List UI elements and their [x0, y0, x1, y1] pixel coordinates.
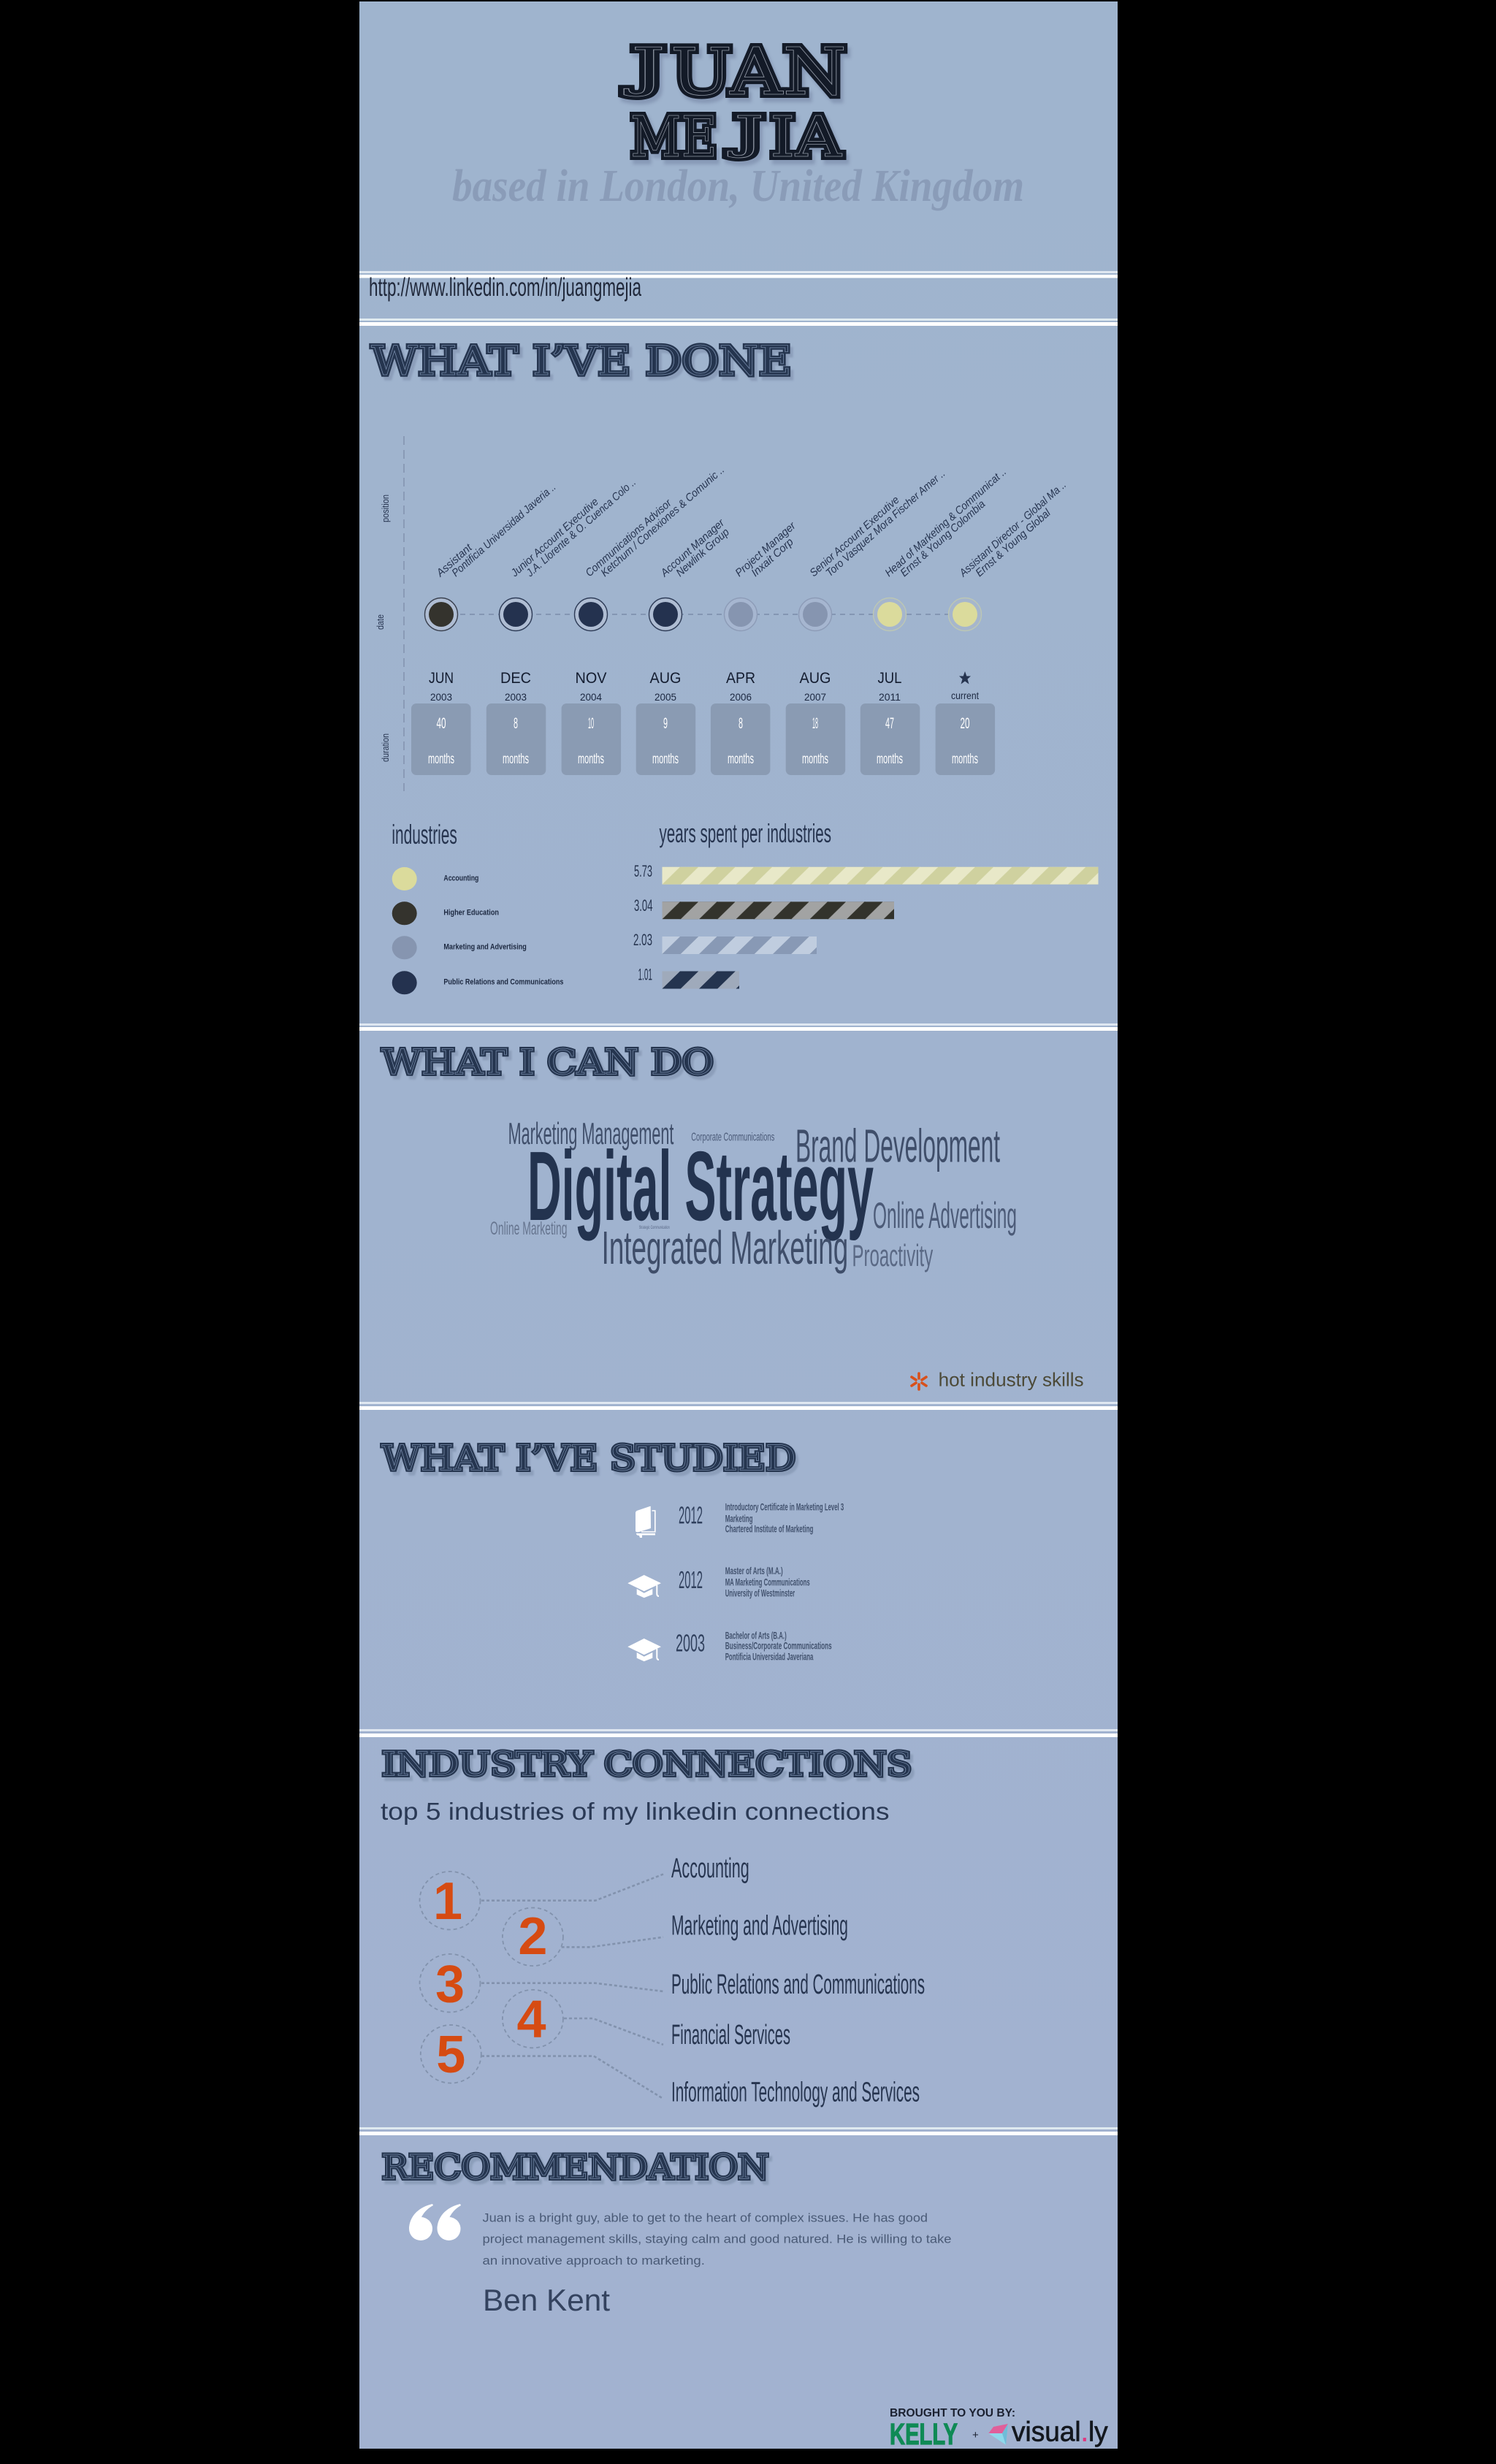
logo: visual.ly wordmark: visual.ly: [1012, 2417, 1108, 2448]
section: what I've done: [371, 337, 1099, 994]
title: Juan Mejia: ME: [630, 105, 717, 170]
title: Juan Mejia: J: [623, 37, 665, 98]
rank 4: financial services: 4: [516, 1991, 546, 2049]
course: certificate: [679, 1500, 844, 1535]
industries legend: Higher Education: [443, 909, 499, 918]
start dates: JUN: [429, 670, 454, 687]
job titles: Inxait Corp: [749, 535, 796, 579]
job titles: [434, 464, 1069, 580]
footer credits: BROUGHT TO YOU BY:: [890, 2407, 1015, 2419]
title: Juan Mejia: UAN: [671, 34, 847, 110]
duration boxes: months: [802, 752, 828, 767]
quote author: Ben Kent: [483, 2283, 610, 2317]
quote text: [482, 2211, 951, 2267]
rank 3: public relations: 3: [435, 1955, 465, 2013]
job titles: J.A. Llorente & O. Cuenca Colo ..: [524, 476, 638, 580]
start dates: [429, 670, 979, 703]
section: what I can do: [381, 1042, 1084, 1390]
title: Juan Mejia: IA: [770, 105, 843, 170]
icon: graduation cap: [627, 1639, 661, 1661]
bar chart: years per industry: 2.03: [633, 931, 652, 949]
start dates: 2006: [730, 691, 752, 703]
title: Juan Mejia: [623, 34, 847, 170]
subheading: top 5 industries of my linkedin connections: [381, 1798, 890, 1825]
duration boxes: months: [578, 752, 604, 767]
start dates: 2004: [580, 691, 602, 703]
rank 3: public relations: Public Relations and Communications: [671, 1969, 925, 2000]
course: masters: MA Marketing Communications: [725, 1576, 810, 1588]
start dates: 2003: [505, 691, 527, 703]
job titles: Assistant: [434, 541, 475, 580]
bar chart: years per industry: years spent per industries: [659, 818, 831, 848]
industries legend: Accounting: [443, 874, 478, 883]
heading: industry connections: INDUSTRY CONNECTIONS: [381, 1744, 912, 1784]
start dates: 2007: [804, 691, 826, 703]
rank 4: financial services: [503, 1990, 790, 2051]
course: masters: Master of Arts (M.A.): [725, 1565, 783, 1576]
start dates: AUG: [650, 670, 681, 687]
start dates: 2005: [654, 691, 676, 703]
start dates: AUG: [799, 670, 831, 687]
section: industry connections: [381, 1744, 925, 2108]
title: Juan Mejia: IA: [770, 105, 843, 170]
duration boxes: months: [952, 752, 978, 767]
rank 1: accounting: [419, 1853, 749, 1931]
bar chart: years per industry: 3.04: [634, 896, 653, 915]
course: certificate: Marketing: [725, 1512, 752, 1524]
course: bachelors: Business/Corporate Communications: [725, 1639, 832, 1651]
job titles: Project Manager: [733, 519, 798, 579]
job titles: Junior Account Executive: [508, 495, 601, 580]
heading: recommendation: RECOMMENDATION: [381, 2148, 768, 2187]
bar chart: years per industry: 1.01: [638, 966, 652, 984]
title: Juan Mejia: UAN: [671, 34, 847, 110]
section: recommendation: [381, 2148, 951, 2317]
course: masters: [679, 1565, 810, 1599]
quote text: Juan is a bright guy, able to get to the heart of complex issues. He has good: [482, 2211, 928, 2225]
duration boxes: 8: [514, 715, 518, 732]
job titles: Head of Marketing & Communicat ..: [882, 465, 1009, 579]
background panel: [359, 1, 1118, 2449]
icon: book: [636, 1506, 655, 1538]
duration boxes: months: [503, 752, 529, 767]
icon: graduation cap: [627, 1575, 661, 1598]
icon: quote mark: [409, 2204, 461, 2240]
start dates: JUL: [878, 670, 901, 687]
rank 5: information technology: Information Technology and Services: [671, 2078, 920, 2108]
duration boxes: 10: [588, 715, 594, 732]
rank 5: information technology: [421, 2025, 920, 2108]
job titles: Assistant Director - Global Ma ..: [957, 478, 1069, 580]
ranking diagram: [419, 1853, 925, 2108]
duration boxes: [411, 703, 995, 775]
job titles: Communications Advisor: [583, 497, 674, 579]
duration boxes: months: [877, 752, 903, 767]
rank 3: public relations: [419, 1954, 925, 2013]
course: certificate: Chartered Institute of Marketing: [725, 1523, 813, 1535]
timeline chart: [375, 436, 1069, 791]
subtitle: location: based in London, United Kingdom: [452, 161, 1024, 211]
duration boxes: months: [652, 752, 679, 767]
start dates: DEC: [500, 670, 531, 687]
skills word cloud: Corporate Communications: [691, 1132, 774, 1144]
caption: hot industry skills: hot industry skills: [939, 1368, 1084, 1390]
industries legend: Public Relations and Communications: [443, 977, 563, 986]
job titles: Ketchum / Conexiones & Comunic ..: [598, 464, 727, 579]
footer credits: [890, 2407, 1108, 2451]
rank 2: marketing and advertising: [503, 1907, 848, 1966]
quote text: an innovative approach to marketing.: [482, 2254, 705, 2267]
duration boxes: 8: [739, 715, 743, 732]
footer credits: +: [972, 2429, 979, 2441]
logo: Kelly: KELLY: [890, 2417, 958, 2451]
course: masters: University of Westminster: [725, 1587, 795, 1599]
section: what I've studied: [381, 1438, 844, 1663]
skills word cloud: Strategic Communication: [639, 1226, 670, 1230]
skills word cloud: Digital Strategy: [527, 1131, 874, 1241]
start dates: APR: [726, 670, 755, 687]
industries legend: industries: [392, 820, 457, 850]
skills word cloud: Integrated Marketing: [602, 1221, 848, 1274]
duration boxes: months: [428, 752, 454, 767]
skills word cloud: Marketing Management: [508, 1116, 674, 1151]
start dates: NOV: [576, 670, 606, 687]
duration boxes: 18: [812, 715, 818, 732]
course: bachelors: [676, 1629, 832, 1663]
title: Juan Mejia: J: [727, 106, 764, 159]
section: what I can do: Online Advertising: [873, 1195, 1017, 1236]
rank 2: marketing and advertising: Marketing and Advertising: [671, 1911, 848, 1942]
bar chart: years per industry: [633, 818, 1099, 989]
job titles: Toro Vasquez Mora Fischer Amer ..: [823, 468, 947, 579]
job titles: Pontificia Universidad Javeria ..: [449, 481, 558, 579]
rank 5: information technology: 5: [436, 2026, 465, 2084]
skills word cloud: Proactivity: [852, 1238, 933, 1273]
course: masters: 2012: [679, 1566, 703, 1593]
course: certificate: 2012: [679, 1502, 703, 1529]
course: bachelors: Pontificia Universidad Javeriana: [725, 1651, 814, 1663]
duration boxes: 40: [437, 715, 446, 732]
bar chart: years per industry: 5.73: [634, 862, 652, 880]
rank 1: accounting: 1: [433, 1872, 462, 1931]
course: certificate: Introductory Certificate in Marketing Level 3: [725, 1500, 844, 1512]
skills word cloud: Brand Development: [795, 1120, 1000, 1172]
rank 2: marketing and advertising: 2: [518, 1907, 547, 1966]
duration boxes: 20: [960, 715, 970, 732]
heading: what I've studied: WHAT I’VE STUDIED: [381, 1438, 796, 1479]
duration boxes: 47: [885, 715, 894, 732]
axis label: date: date: [375, 614, 386, 630]
job titles: Ernst & Young Colombia: [898, 498, 988, 579]
quote text: project management skills, staying calm and good natured. He is willing to take: [482, 2232, 951, 2246]
heading: what I've done: WHAT I’VE DONE: [371, 337, 792, 385]
skills word cloud: [490, 1116, 1017, 1274]
rank 4: financial services: Financial Services: [671, 2020, 790, 2051]
heading: what I've done: WHAT I’VE DONE: [371, 337, 792, 385]
job titles: Senior Account Executive: [807, 494, 902, 579]
axis label: duration: duration: [380, 733, 391, 762]
title: Juan Mejia: ME: [630, 105, 717, 170]
heading: industry connections: INDUSTRY CONNECTIONS: [381, 1744, 912, 1784]
duration boxes: 9: [663, 715, 668, 732]
industries legend: [392, 820, 563, 994]
profile link: http://www.linkedin.com/in/juangmejia: [369, 273, 641, 302]
course: bachelors: 2003: [676, 1630, 705, 1657]
heading: what I can do: WHAT I CAN DO: [381, 1042, 714, 1083]
heading: recommendation: RECOMMENDATION: [381, 2148, 768, 2187]
logo: visual.ly icon: [988, 2424, 1008, 2445]
job titles: Newlink Group: [673, 526, 732, 579]
skills word cloud: Online Marketing: [490, 1218, 567, 1239]
axis label: position: position: [380, 495, 391, 522]
duration boxes: months: [728, 752, 754, 767]
title: Juan Mejia: J: [623, 37, 665, 98]
header: [369, 34, 1024, 302]
job titles: Ernst & Young Global: [973, 506, 1053, 579]
heading: what I've studied: WHAT I’VE STUDIED: [381, 1438, 796, 1479]
heading: what I can do: WHAT I CAN DO: [381, 1042, 714, 1083]
industries legend: Marketing and Advertising: [443, 942, 527, 951]
start dates: 2011: [879, 691, 901, 703]
title: Juan Mejia: J: [727, 106, 764, 159]
start dates: current: [951, 690, 979, 701]
icon: orange asterisk: [912, 1373, 926, 1389]
job titles: Account Manager: [658, 516, 728, 580]
start dates: 2003: [430, 691, 452, 703]
course: bachelors: Bachelor of Arts (B.A.): [725, 1629, 787, 1641]
timeline nodes: [425, 598, 982, 631]
rank 1: accounting: Accounting: [671, 1853, 749, 1884]
